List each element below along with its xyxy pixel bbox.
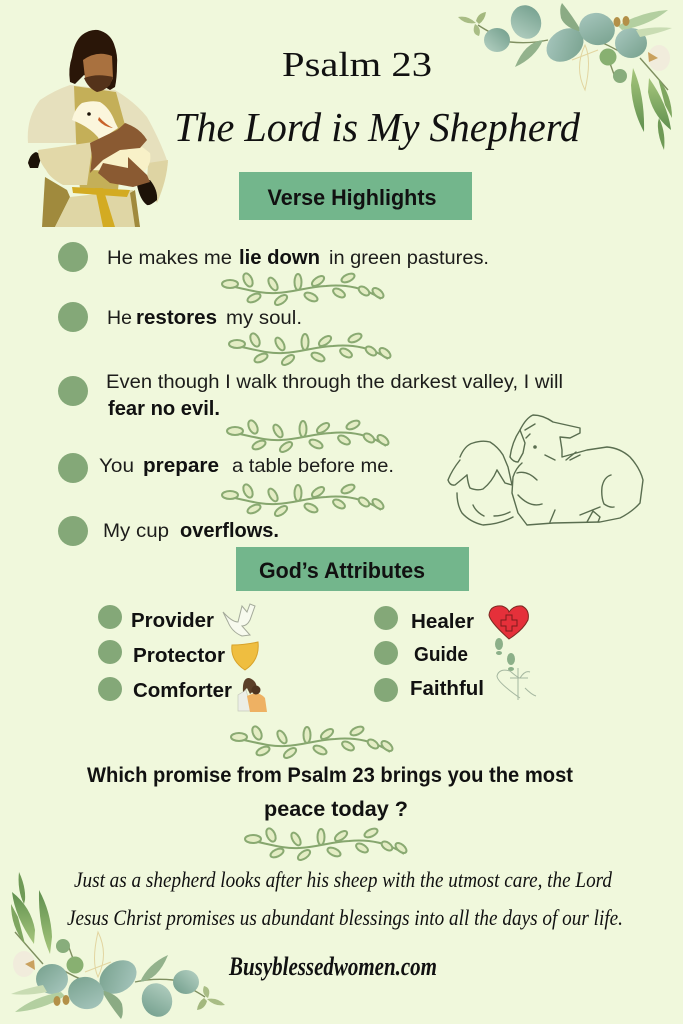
website credit: Busyblessedwomen.com bbox=[228, 952, 437, 981]
attribute: Comforter bbox=[98, 677, 267, 712]
verse 5: overflows. bbox=[180, 520, 279, 542]
question text: peace today ? bbox=[264, 798, 408, 821]
closing paragraph bbox=[67, 867, 623, 930]
attribute: Faithful bbox=[374, 668, 536, 702]
verse 1: in green pastures. bbox=[329, 247, 489, 269]
attribute: Protector: Protector bbox=[133, 645, 225, 667]
verse 2: restores bbox=[136, 307, 217, 329]
verse 1: lie down bbox=[239, 247, 320, 269]
verse 4 bbox=[58, 453, 394, 483]
divider sprig 4 bbox=[222, 483, 385, 518]
closing paragraph: Just as a shepherd looks after his sheep with the utmost care, the Lord bbox=[74, 867, 613, 892]
attribute: Provider: Provider bbox=[131, 610, 214, 632]
divider sprig 1 bbox=[222, 272, 385, 307]
illustration: two resting lambs bbox=[448, 415, 643, 525]
heading: God's Attributes bbox=[236, 547, 469, 591]
attribute: Faithful: Faithful bbox=[410, 678, 484, 700]
verse 2: He bbox=[107, 307, 132, 329]
divider sprig 6 bbox=[245, 827, 408, 862]
question text bbox=[87, 764, 573, 821]
attribute: Comforter: Comforter bbox=[133, 680, 232, 702]
verse 4: prepare bbox=[143, 455, 219, 477]
verse 5 bbox=[58, 516, 279, 546]
attribute: Protector bbox=[98, 640, 258, 670]
verse 2: my soul. bbox=[226, 307, 302, 329]
question text: Which promise from Psalm 23 brings you the most bbox=[87, 764, 573, 787]
verse 2 bbox=[58, 302, 302, 332]
attribute: Healer: Healer bbox=[411, 611, 474, 633]
title: The Lord is My Shepherd: The Lord is My Shepherd bbox=[174, 104, 580, 150]
attribute: Provider bbox=[98, 604, 255, 636]
attribute: Guide bbox=[374, 638, 515, 671]
verse 5: My cup bbox=[103, 520, 169, 542]
attribute: Guide: Guide bbox=[414, 644, 468, 666]
title: Psalm 23: Psalm 23 bbox=[282, 45, 432, 84]
heading: Verse Highlights: Verse Highlights bbox=[268, 185, 436, 210]
divider sprig 3 bbox=[227, 419, 390, 454]
heading: Verse Highlights bbox=[239, 172, 472, 220]
decoration: bottom left leaves bbox=[11, 872, 225, 1021]
attribute: Healer bbox=[374, 606, 528, 639]
verse 4: You bbox=[99, 455, 134, 477]
divider sprig 5 bbox=[231, 725, 394, 760]
heading: God's Attributes: God’s Attributes bbox=[259, 558, 425, 583]
verse 3 bbox=[58, 371, 563, 420]
verse 1: He makes me bbox=[107, 247, 232, 269]
verse 3: fear no evil. bbox=[108, 398, 220, 420]
verse 3: Even though I walk through the darkest valley, I will bbox=[106, 371, 563, 393]
illustration: shepherd holding a lamb bbox=[28, 30, 168, 227]
verse 1 bbox=[58, 242, 489, 272]
divider sprig 2 bbox=[229, 332, 392, 367]
decoration: top right leaves bbox=[458, 1, 672, 150]
verse 4: a table before me. bbox=[232, 455, 394, 477]
